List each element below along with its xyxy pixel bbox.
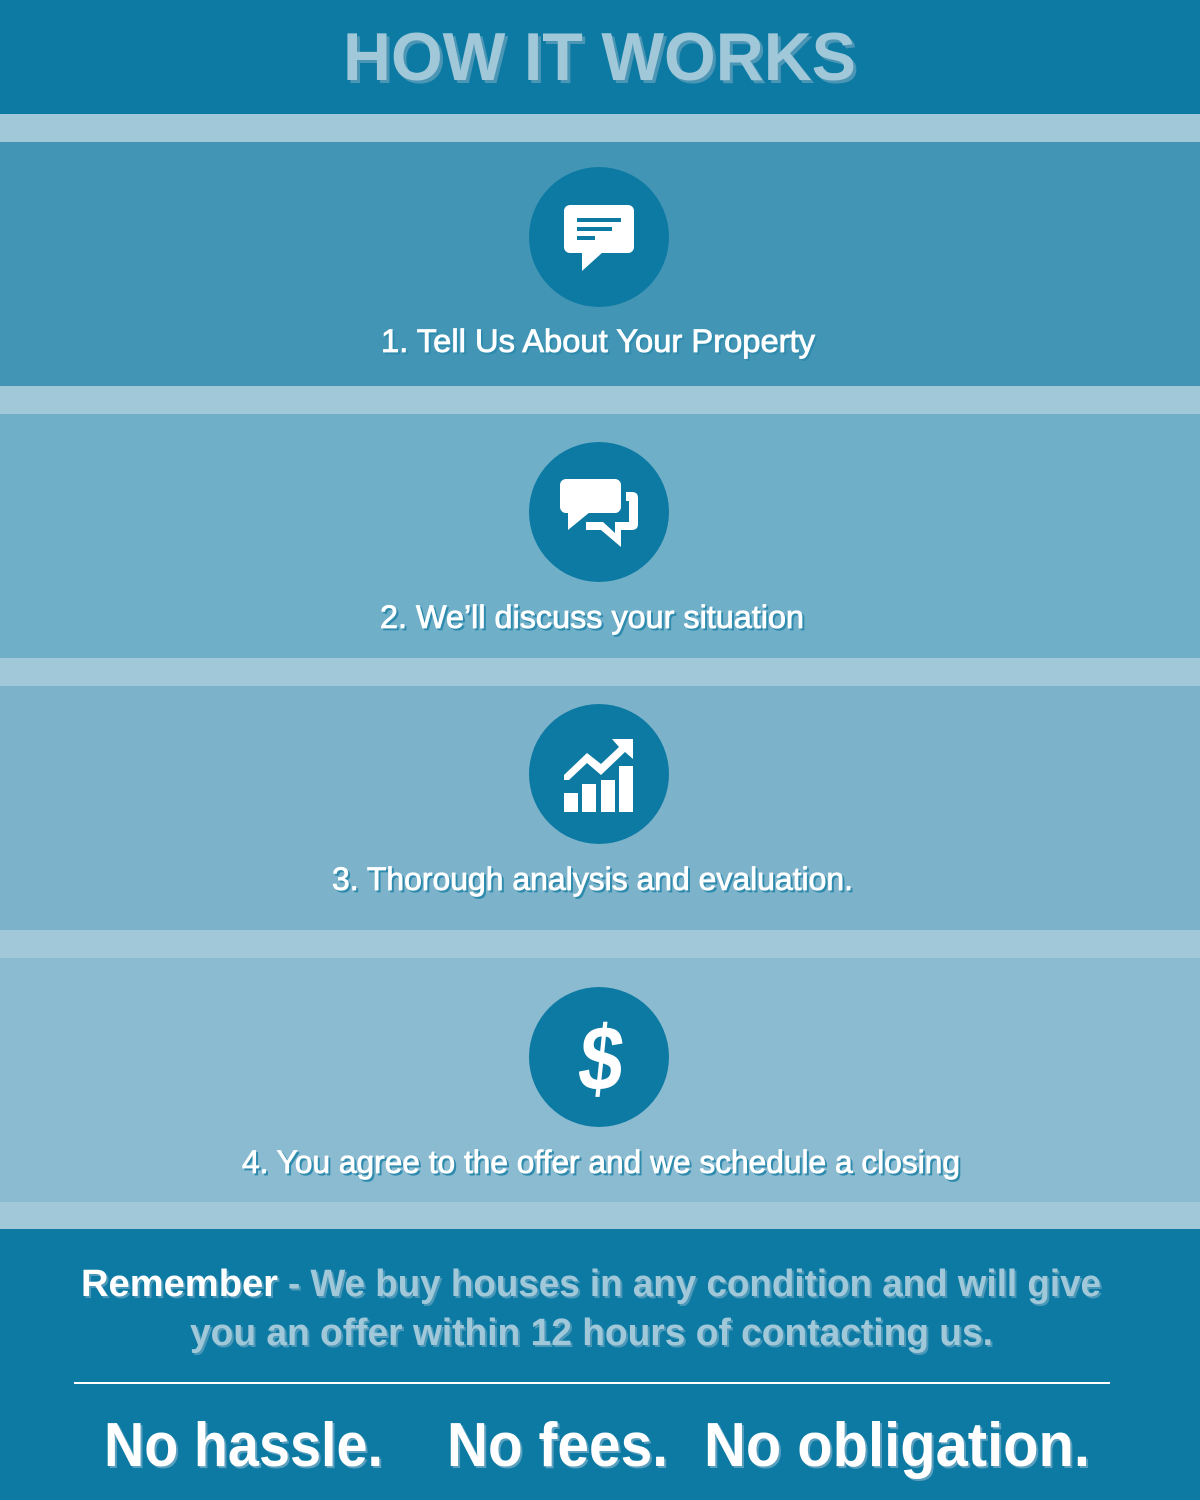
icon: speech bubble with text lines (529, 167, 669, 307)
reminder text (81, 1263, 1101, 1354)
panel: step 2 (0, 414, 1200, 658)
step 3 label: 3. Thorough analysis and evaluation. (332, 861, 853, 897)
title: HOW IT WORKS (343, 19, 856, 95)
panel: step 1 (0, 142, 1200, 386)
step 4 label: 4. You agree to the offer and we schedule a closing (242, 1144, 960, 1180)
header panel (0, 0, 1200, 114)
reminder text: Remember (81, 1263, 278, 1305)
panel: footer (0, 1229, 1200, 1500)
step 2 label: 2. We’ll discuss your situation (380, 599, 804, 635)
icon: dollar sign (529, 987, 669, 1127)
reminder text: - We buy houses in any condition and will give (288, 1263, 1101, 1305)
reminder text: you an offer within 12 hours of contacting us. (190, 1312, 993, 1354)
panel: step 4 (0, 958, 1200, 1202)
icon: rising bar chart with arrow (529, 704, 669, 844)
panel: step 3 (0, 686, 1200, 930)
icon: dollar sign: $ (574, 1008, 629, 1110)
step 1 label: 1. Tell Us About Your Property (381, 323, 815, 359)
tagline: no hassle: No hassle. (104, 1411, 383, 1480)
tagline: no obligation: No obligation. (704, 1411, 1090, 1480)
tagline: no fees: No fees. (447, 1411, 668, 1480)
icon: two speech bubbles (529, 442, 669, 582)
